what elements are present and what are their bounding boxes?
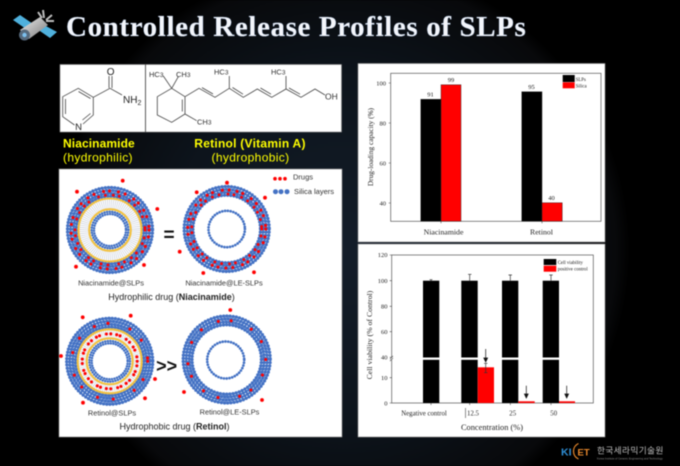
axis ticks: [389, 83, 542, 223]
molecule: niacinamide: O: [107, 67, 115, 78]
x axis labels: 12.5: [467, 410, 480, 418]
particle: Retinol@SLPs: [59, 314, 157, 405]
legend: Silica: [576, 84, 587, 89]
x axis labels: Retinol: [530, 228, 554, 236]
axis break: [388, 356, 582, 361]
legend: [544, 259, 588, 272]
y axis ticks: 0: [384, 400, 388, 407]
x axis labels: Niacinamide: [424, 228, 464, 236]
plot frame: [392, 255, 593, 403]
legend: Drugs: [293, 172, 313, 182]
molecule: niacinamide: N: [75, 122, 82, 133]
molecule: retinol: HC3: [214, 68, 229, 76]
bar values: 95: [528, 84, 535, 91]
logo: KICET: 한국세라믹기술원: [597, 444, 664, 456]
particle: Niacinamide@LE-SLPs: [178, 181, 269, 275]
bar values: [427, 77, 555, 202]
y axis ticks: [376, 80, 386, 208]
axis ticks: [390, 255, 551, 418]
symbol: much greater than: >>: [156, 356, 177, 376]
bar values: 91: [427, 92, 434, 98]
bar values: 99: [448, 77, 454, 84]
label: Niacinamide@SLPs: Niacinamide@SLPs: [78, 278, 144, 288]
error bars: [430, 274, 553, 373]
icon: satellite: [13, 10, 57, 40]
bars: niacinamide: [421, 85, 461, 221]
molecule: retinol: CH3: [176, 70, 191, 79]
title: Controlled Release Profiles of SLPs: [66, 11, 526, 43]
y axis ticks: 10: [381, 375, 388, 382]
legend: Silica layers: [294, 187, 334, 196]
x axis labels: [424, 228, 554, 236]
logo: KICET: ET: [578, 448, 590, 458]
arrows: [484, 349, 569, 398]
molecule: niacinamide: NH: [123, 95, 137, 106]
x axis title: Concentration (%): [461, 423, 523, 432]
molecule: niacinamide: 2: [137, 100, 141, 107]
bars: retinol: [522, 92, 562, 221]
x axis labels: 25: [509, 410, 517, 418]
caption: hydrophobic drug: Hydrophobic drug (Retinol): [119, 422, 230, 432]
y axis ticks: [378, 252, 388, 407]
molecule: retinol: HC3: [149, 70, 164, 79]
molecule: retinol: HC3: [271, 68, 286, 76]
legend: [563, 75, 587, 89]
chart: drug-loading capacity: [358, 64, 605, 242]
panel: molecular structures: [60, 64, 342, 133]
molecule: retinol: CH3: [197, 118, 212, 126]
label: hydrophobic: (hydrophobic): [212, 150, 289, 164]
chart: cell viability: [358, 244, 605, 437]
label: niacinamide: Niacinamide: [63, 136, 135, 150]
chart background: [358, 244, 605, 437]
logo: KICET: Korea Institute of Ceramic Engineering and Technology: [597, 456, 663, 460]
label: Retinol@SLPs: Retinol@SLPs: [88, 408, 136, 418]
particle: Niacinamide@SLPs: [68, 179, 159, 272]
y axis title: Cell viability (% of Control): [365, 290, 374, 379]
bars: cell viability: [423, 281, 559, 403]
panel background: [60, 64, 342, 132]
label: Niacinamide@LE-SLPs: Niacinamide@LE-SLPs: [185, 278, 263, 288]
molecule: retinol: [149, 68, 338, 126]
legend: SLPs: [576, 78, 586, 83]
label: Retinol@LE-SLPs: Retinol@LE-SLPs: [200, 408, 260, 416]
x axis labels: [401, 410, 558, 418]
y axis ticks: 80: [380, 120, 386, 128]
molecule: niacinamide: [63, 67, 141, 133]
y axis ticks: 40: [381, 354, 388, 362]
y axis ticks: 100: [378, 278, 388, 285]
y axis ticks: 80: [381, 304, 388, 310]
plot frame: [391, 73, 601, 221]
symbol: equals: =: [163, 225, 175, 246]
y axis title: Drug-loading capacity (%): [366, 107, 375, 186]
legend: positive control: [558, 268, 588, 272]
y axis ticks: 100: [376, 80, 386, 88]
panel: nanoparticle diagrams: [59, 169, 342, 437]
label: retinol: Retinol (Vitamin A): [194, 136, 306, 150]
bar values: 40: [548, 195, 555, 202]
y axis ticks: 40: [380, 200, 386, 208]
legend: Cell viability: [558, 261, 583, 266]
bars: positive control: [478, 367, 575, 403]
y axis ticks: 120: [378, 252, 388, 259]
legend: [273, 172, 334, 196]
divider: [144, 64, 146, 132]
particle: Retinol@LE-SLPs: [182, 308, 270, 403]
logo: KICET: [561, 444, 664, 460]
caption: hydrophilic drug: Hydrophilic drug (Niacinamide): [108, 292, 235, 302]
x axis labels: Negative control: [401, 410, 447, 418]
y axis ticks: 60: [381, 329, 388, 336]
label: hydrophilic: (hydrophilic): [63, 150, 133, 164]
chart background: [358, 64, 605, 242]
panel background: [59, 169, 342, 437]
molecule: retinol: OH: [325, 92, 338, 102]
x axis labels: 50: [550, 410, 558, 418]
logo: KICET: KI: [561, 446, 572, 458]
y axis ticks: 60: [380, 160, 386, 168]
